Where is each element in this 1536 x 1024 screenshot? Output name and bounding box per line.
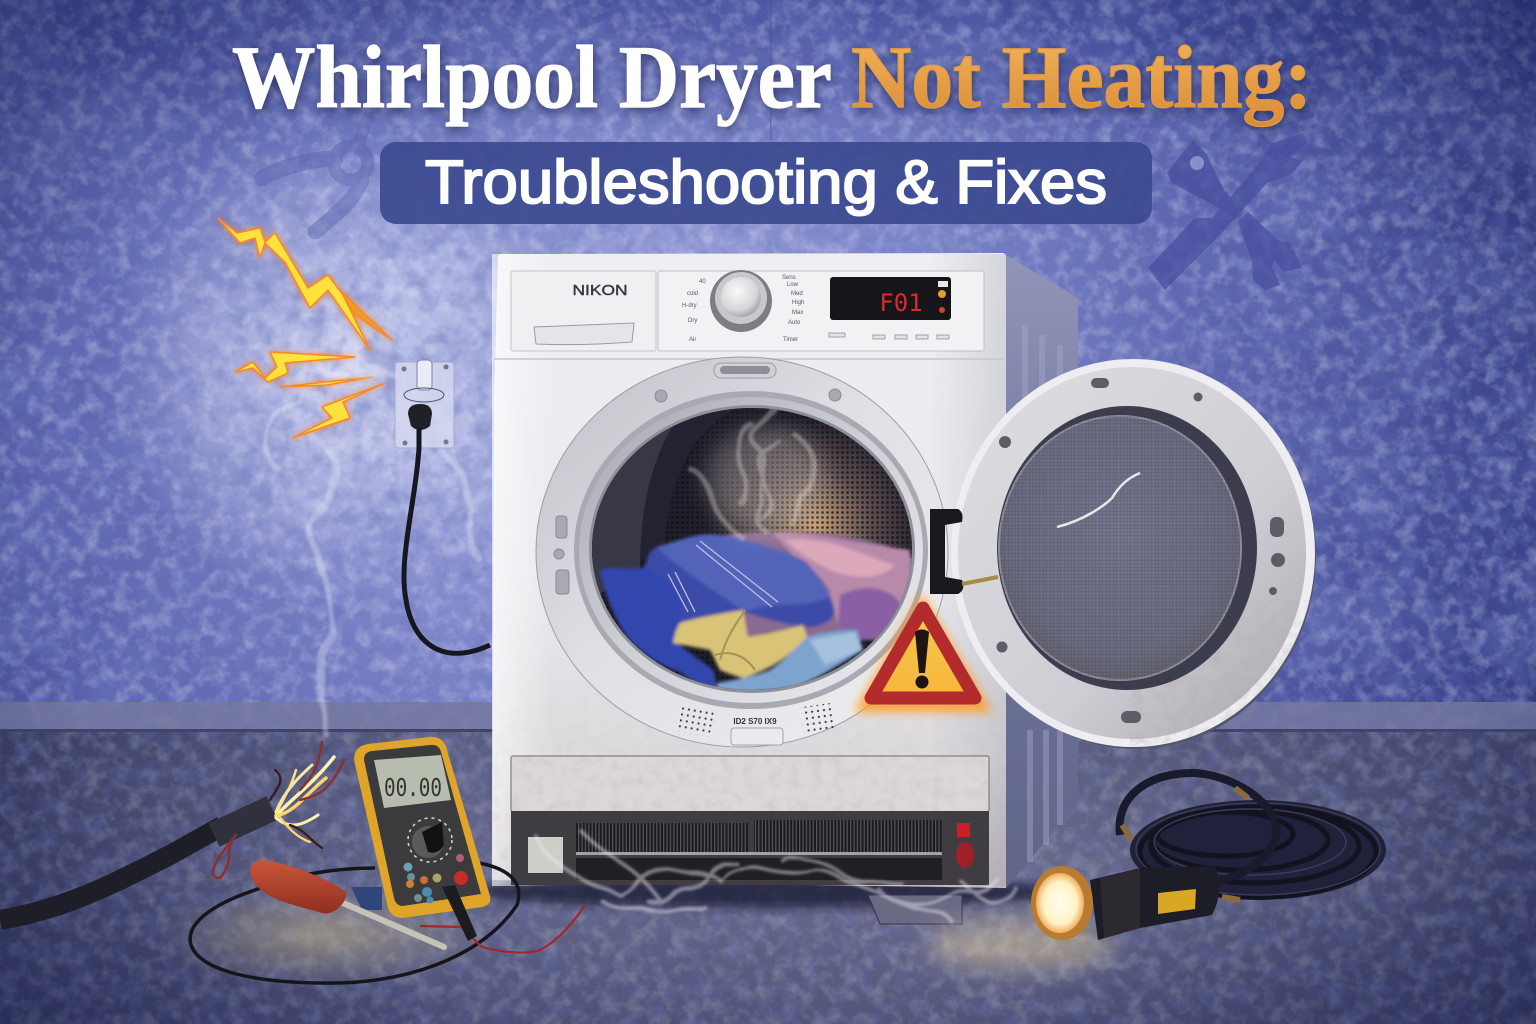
detergent drawer handle (534, 323, 634, 345)
program tick labels: Max (792, 310, 803, 316)
test lead loop (190, 863, 519, 983)
program tick labels: H-dry (682, 303, 697, 309)
dryer door ring and drum opening (536, 357, 948, 747)
control panel (494, 270, 1004, 359)
digital display: F01 (879, 289, 923, 317)
warning triangle (854, 594, 992, 712)
background: floor with baseboard (0, 702, 1536, 1024)
icon: faint pliers left (262, 118, 368, 232)
program tick labels: Auto (788, 320, 801, 326)
door hinge (930, 509, 998, 594)
meter screen (374, 755, 451, 808)
program tick labels: Dry (688, 318, 697, 324)
screwdriver (250, 860, 444, 947)
program tick labels: Timer (783, 337, 798, 343)
smoke from vent (530, 830, 1020, 930)
meter screen: 00.00 (384, 773, 442, 802)
door bolts (996, 378, 1285, 723)
laundry in drum (600, 532, 915, 692)
dryer foot (868, 895, 962, 924)
title: Whirlpool Dryer Not Heating: (232, 29, 1312, 127)
program tick labels: cold (687, 291, 698, 297)
program tick labels: High (792, 300, 804, 306)
drum interior (590, 400, 915, 695)
steam in drum (690, 395, 825, 540)
door release button (731, 728, 783, 745)
door latch recess (714, 363, 776, 378)
dryer side panel (1004, 254, 1078, 888)
frayed cable with sparks (0, 742, 344, 920)
coiled hose (1120, 773, 1386, 900)
small label on ring: ID2 S70 IX9 (733, 717, 777, 726)
program tick labels (682, 275, 804, 343)
icon: crossed wrenches right (1148, 133, 1307, 290)
open door (930, 359, 1320, 750)
smoke wisps on wall (263, 370, 480, 740)
wall outlet with plug and cord (395, 360, 490, 653)
probe connector (442, 885, 477, 941)
subtitle banner: Troubleshooting & Fixes (425, 148, 1107, 216)
program knob (710, 270, 772, 332)
panel buttons (829, 333, 949, 339)
program tick labels: 40 (699, 279, 706, 285)
icon: lightning bolts (218, 218, 392, 438)
program tick labels: Med (791, 291, 803, 297)
vent dots (678, 703, 836, 737)
background: wall (0, 0, 1536, 730)
ring bolts (554, 389, 841, 594)
multimeter (190, 737, 585, 983)
program tick labels: Low (787, 282, 799, 288)
program tick labels: Sens (782, 275, 796, 281)
meter dial (408, 818, 452, 862)
dryer shadow on floor (470, 876, 1070, 908)
dryer front body (492, 253, 1006, 888)
program tick labels: Air (689, 337, 696, 343)
digital display (830, 277, 951, 320)
brand label: NIKON (572, 282, 628, 299)
dryer (470, 253, 1078, 924)
flashlight (925, 866, 1219, 971)
meter buttons (404, 854, 468, 904)
lower vent panel (511, 756, 989, 885)
